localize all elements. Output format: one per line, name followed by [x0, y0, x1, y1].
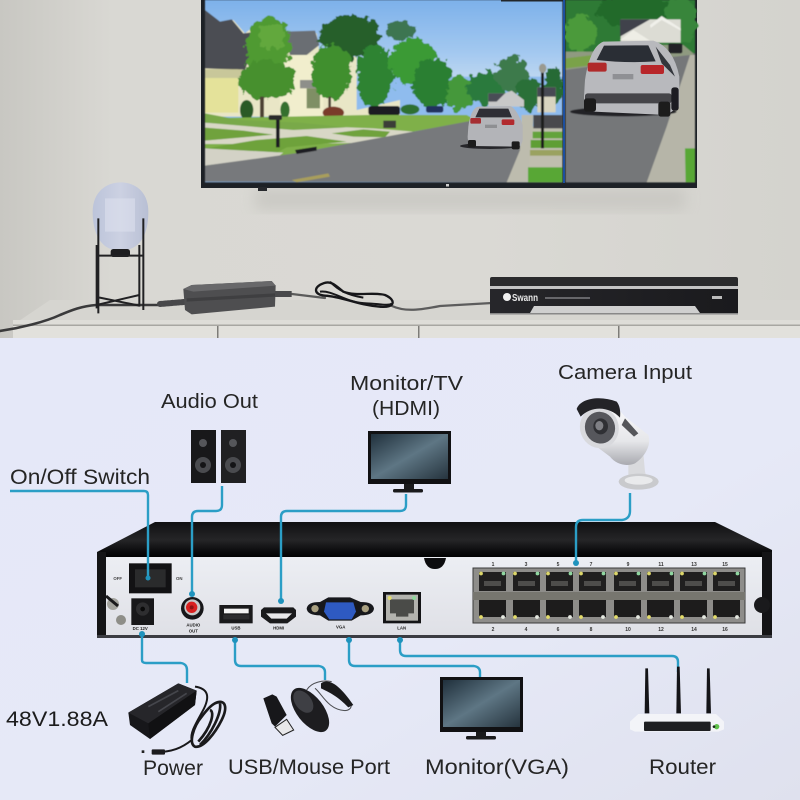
- side screw and post, left: [106, 596, 126, 625]
- camera ports, bottom row: [479, 600, 740, 619]
- wall-mounted TV: [201, 0, 697, 191]
- left camera view: street scene: [205, 0, 563, 182]
- even port numbers: 2: [492, 627, 495, 633]
- HDMI port: [261, 607, 296, 631]
- audio out jack: OUT: [189, 628, 198, 633]
- panel: connection diagram background: [0, 338, 800, 800]
- kerb, right verge: [507, 115, 533, 182]
- odd port numbers: 11: [658, 562, 664, 568]
- label: Monitor/TV (HDMI): (HDMI): [372, 398, 440, 420]
- even port numbers: 10: [625, 627, 631, 633]
- houses: [205, 10, 400, 117]
- odd port numbers: 7: [590, 562, 593, 568]
- 16-port PoE camera input panel: [473, 562, 745, 633]
- audio out jack: [181, 597, 204, 633]
- odd port numbers: 13: [691, 562, 697, 568]
- power switch: ON: [176, 576, 182, 581]
- even port numbers: 4: [525, 627, 528, 633]
- car: left view: [460, 106, 523, 149]
- LAN port: [383, 592, 421, 630]
- even port numbers: 14: [691, 627, 697, 633]
- logo text: [503, 293, 538, 304]
- even port numbers: [492, 627, 728, 633]
- panel: room scene photo: [0, 0, 800, 338]
- LAN port: LAN: [397, 625, 406, 630]
- icon: router: [630, 667, 724, 732]
- TV shadow on the wall: [255, 188, 685, 210]
- even port numbers: 12: [658, 627, 664, 633]
- odd port numbers: 9: [627, 562, 630, 568]
- power switch: [113, 563, 182, 593]
- label: Router: Router: [649, 756, 716, 779]
- coiled cable: [316, 282, 393, 307]
- NVR rear chassis: [97, 522, 772, 638]
- audio out jack: AUDIO: [186, 622, 201, 627]
- even port numbers: 16: [722, 627, 728, 633]
- side screw, right: [754, 597, 770, 613]
- odd port numbers: [492, 562, 728, 568]
- lamp: [93, 182, 148, 313]
- post and lamp: [541, 72, 544, 148]
- even port numbers: 6: [557, 627, 560, 633]
- rear ports: [113, 563, 421, 633]
- icon: monitor VGA: [440, 677, 523, 740]
- label: power rating: 48V1.88A: [6, 708, 108, 731]
- USB port: USB: [231, 626, 241, 631]
- connector lines: [10, 486, 678, 683]
- DC power jack: [131, 598, 154, 631]
- power adapter: [183, 281, 292, 314]
- power switch: OFF: [113, 576, 122, 581]
- label: On/Off Switch: On/Off Switch: [10, 466, 150, 489]
- right camera view: close-up of car: [565, 0, 697, 182]
- camera ports, top row: [479, 572, 740, 591]
- trees: [238, 15, 563, 112]
- even port numbers: 8: [590, 627, 593, 633]
- shrubs and parked cars: [323, 107, 344, 119]
- odd port numbers: 3: [525, 562, 528, 568]
- USB port: [219, 605, 253, 631]
- odd port numbers: 5: [557, 562, 560, 568]
- label: Monitor/TV (HDMI): [350, 373, 464, 420]
- DC power jack: DC 12V: [133, 626, 148, 631]
- shelf: [13, 300, 800, 338]
- VGA port: VGA: [336, 625, 346, 630]
- VGA port: [307, 597, 374, 630]
- icon: security camera: [574, 398, 659, 490]
- label: Monitor(VGA): Monitor(VGA): [425, 756, 569, 779]
- icon: USB stick: [263, 694, 294, 735]
- label: Audio Out: Audio Out: [161, 391, 258, 413]
- distant houses: [488, 91, 524, 107]
- HDMI port: HDMI: [273, 626, 284, 631]
- NVR recorder on shelf: [490, 277, 738, 314]
- label: Camera Input: Camera Input: [558, 362, 692, 384]
- icon: monitor HDMI: [368, 431, 451, 492]
- power cables: [0, 293, 492, 331]
- label: USB/Mouse Port: USB/Mouse Port: [228, 756, 390, 779]
- icon: mouse: [283, 681, 353, 739]
- icon: power supply: [128, 683, 225, 755]
- logo text: Swann: [512, 293, 538, 304]
- label: Monitor/TV (HDMI): Monitor/TV: [350, 373, 464, 395]
- icon: speakers: [191, 430, 246, 483]
- lawns: [205, 115, 477, 166]
- label: Power: Power: [143, 757, 203, 780]
- odd port numbers: 15: [722, 562, 728, 568]
- connector dots: [139, 560, 579, 643]
- odd port numbers: 1: [492, 562, 495, 568]
